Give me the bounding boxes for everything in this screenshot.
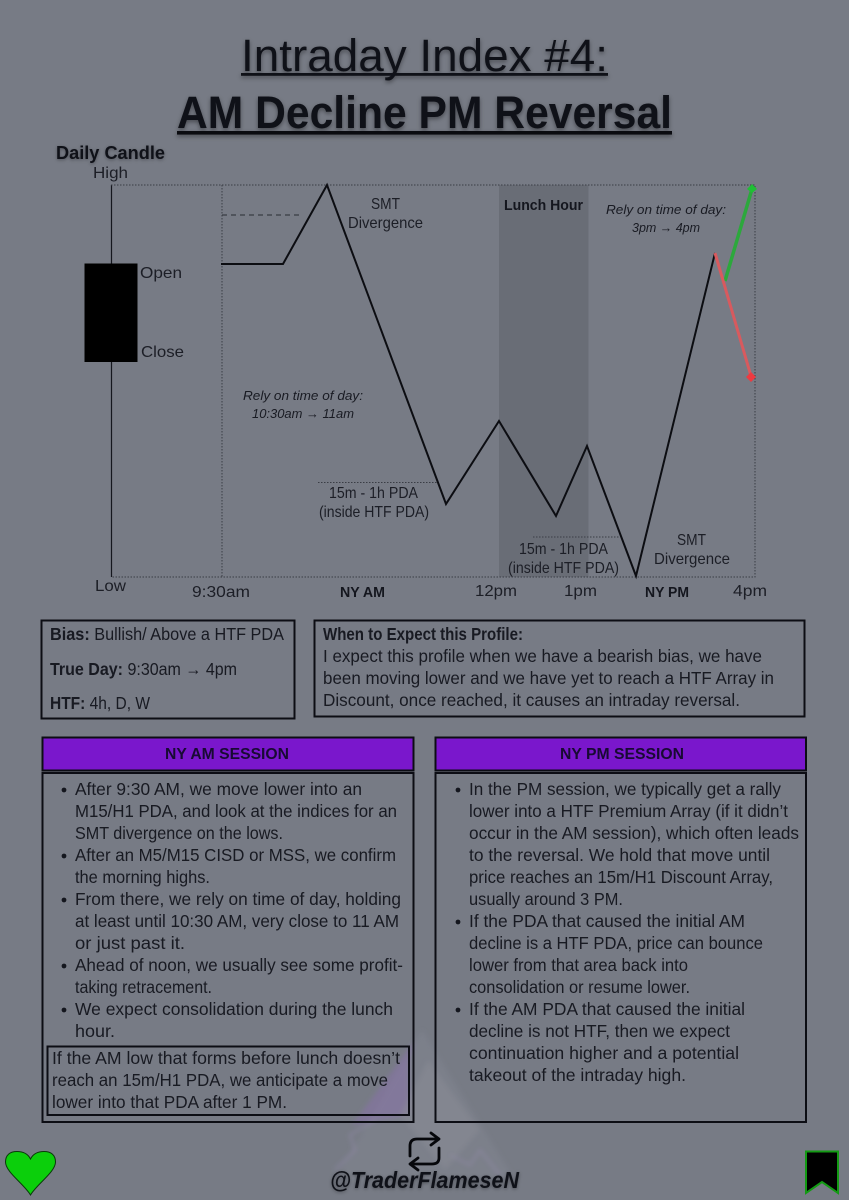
label: PDA morning: 15m - 1h PDA — [329, 485, 418, 502]
label: PDA morning: (inside HTF PDA) — [319, 504, 429, 521]
header: NY AM session — [42, 738, 414, 770]
time axis labels: 1pm — [564, 583, 597, 600]
panel: bias: True Day: 9:30am → 4pm — [50, 659, 237, 679]
lunch hour band — [499, 185, 588, 577]
label: low: Low — [95, 578, 126, 595]
header: NY PM session — [436, 738, 806, 770]
chart frame dotted lines — [111, 185, 755, 577]
AM bullet list: taking retracement. — [75, 977, 212, 997]
icon: heart — [6, 1152, 56, 1195]
price line — [221, 185, 715, 576]
AM callout box — [48, 1046, 409, 1115]
panel: when to expect this profile: I expect this profile when we have a bearish bias, we have — [323, 646, 762, 666]
label: rely on time 3pm: Rely on time of day: — [606, 202, 726, 217]
red projection arrow — [715, 253, 756, 382]
header: NY PM session: NY PM SESSION — [560, 746, 684, 763]
watermark: mountain logo — [335, 1030, 515, 1180]
label: SMT divergence top: Divergence — [348, 215, 423, 232]
chart: daily candle — [56, 143, 184, 595]
PM body box — [436, 773, 806, 1122]
PM bullet list: lower from that area back into — [469, 955, 688, 975]
AM bullet list: hour. — [75, 1021, 115, 1041]
green projection arrow — [725, 184, 757, 281]
PM bullet list: occur in the AM session), which often leads — [469, 823, 799, 843]
AM callout box: lower into that PDA after 1 PM. — [52, 1092, 287, 1112]
label: rely on time 3pm: 3pm → 4pm — [632, 220, 700, 235]
panel: bias: HTF: 4h, D, W — [50, 693, 150, 713]
title — [177, 30, 672, 138]
chart: intraday price path — [111, 184, 767, 601]
time axis labels: 4pm — [733, 583, 767, 600]
PM bullet list: decline is a HTF PDA, price can bounce — [469, 933, 763, 953]
PDA levels — [318, 482, 620, 537]
time axis labels: 12pm — [475, 583, 517, 600]
AM bullet list: or just past it. — [75, 933, 185, 953]
AM bullet list: at least until 10:30 AM, very close to 11 AM — [75, 911, 399, 931]
PM bullet list: usually around 3 PM. — [469, 889, 623, 909]
panel: bias — [42, 620, 294, 718]
icon: repost arrows — [410, 1133, 439, 1170]
panel: bias: Bias: Bullish/ Above a HTF PDA — [50, 624, 284, 644]
AM body box — [42, 773, 414, 1122]
label: high: High — [93, 165, 128, 182]
label: rely on time 10:30am: 10:30am → 11am — [252, 406, 354, 421]
AM bullet list: After an M5/M15 CISD or MSS, we confirm — [75, 845, 396, 865]
candle wick — [110, 185, 112, 577]
label: lunch hour: Lunch Hour — [504, 198, 583, 214]
label: SMT divergence bottom: SMT — [677, 532, 706, 549]
AM bullet list: Ahead of noon, we usually see some profit- — [75, 955, 403, 975]
PM bullet list: In the PM session, we typically get a rally — [469, 779, 781, 799]
PM bullet list: If the PDA that caused the initial AM — [469, 911, 745, 931]
PM bullet list: lower into a HTF Premium Array (if it didn’t — [469, 801, 788, 821]
candle body — [84, 264, 138, 362]
heading: daily candle: Daily Candle — [56, 143, 165, 163]
time axis labels — [192, 583, 767, 601]
panel: NY AM session — [42, 738, 414, 1122]
header: NY AM session: NY AM SESSION — [165, 746, 289, 763]
PM bullet list: price reaches an 15m/H1 Discount Array, — [469, 867, 773, 887]
AM callout box: reach an 15m/H1 PDA, we anticipate a move — [52, 1070, 388, 1090]
time axis labels: NY PM — [645, 585, 689, 601]
panel: when to expect this profile: been moving lower and we have yet to reach a HTF Array in — [323, 668, 774, 688]
panel: NY PM session — [436, 738, 806, 1122]
PM bullet list: takeout of the intraday high. — [469, 1065, 686, 1085]
AM bullet list: SMT divergence on the lows. — [75, 823, 283, 843]
dashed level — [222, 214, 303, 216]
panel: when to expect this profile: When to Expect this Profile: — [323, 624, 523, 644]
label: PDA afternoon: 15m - 1h PDA — [519, 541, 608, 558]
label: PDA afternoon: (inside HTF PDA) — [508, 560, 619, 577]
AM bullet list: From there, we rely on time of day, holding — [75, 889, 401, 909]
PM bullet list: to the reversal. We hold that move until — [469, 845, 770, 865]
panel: when to expect this profile — [314, 620, 804, 716]
label: rely on time 10:30am: Rely on time of day: — [243, 388, 363, 403]
icon: bookmark — [806, 1152, 838, 1193]
PM bullet list: If the AM PDA that caused the initial — [469, 999, 745, 1019]
handle: @TraderFlameseN — [330, 1167, 519, 1193]
title: Intraday Index #4: — [241, 30, 608, 81]
panel: when to expect this profile: Discount, once reached, it causes an intraday reversal. — [323, 690, 740, 710]
title: AM Decline PM Reversal — [177, 87, 672, 138]
label: open: Open — [140, 265, 182, 282]
label: close: Close — [141, 344, 184, 361]
AM bullet list: After 9:30 AM, we move lower into an — [75, 779, 362, 799]
time axis labels: 9:30am — [192, 584, 250, 601]
label: SMT divergence top: SMT — [371, 196, 400, 213]
PM bullet list: decline is not HTF, then we expect — [469, 1021, 730, 1041]
AM bullet list: M15/H1 PDA, and look at the indices for an — [75, 801, 397, 821]
PM bullet list: continuation higher and a potential — [469, 1043, 739, 1063]
AM bullet list — [62, 779, 403, 1041]
time axis labels: NY AM — [340, 585, 385, 601]
PM bullet list: consolidation or resume lower. — [469, 977, 690, 997]
AM bullet list: the morning highs. — [75, 867, 210, 887]
PM bullet list — [456, 779, 799, 1085]
label: SMT divergence bottom: Divergence — [654, 551, 730, 568]
AM callout box: If the AM low that forms before lunch doesn’t — [52, 1048, 400, 1068]
AM bullet list: We expect consolidation during the lunch — [75, 999, 393, 1019]
